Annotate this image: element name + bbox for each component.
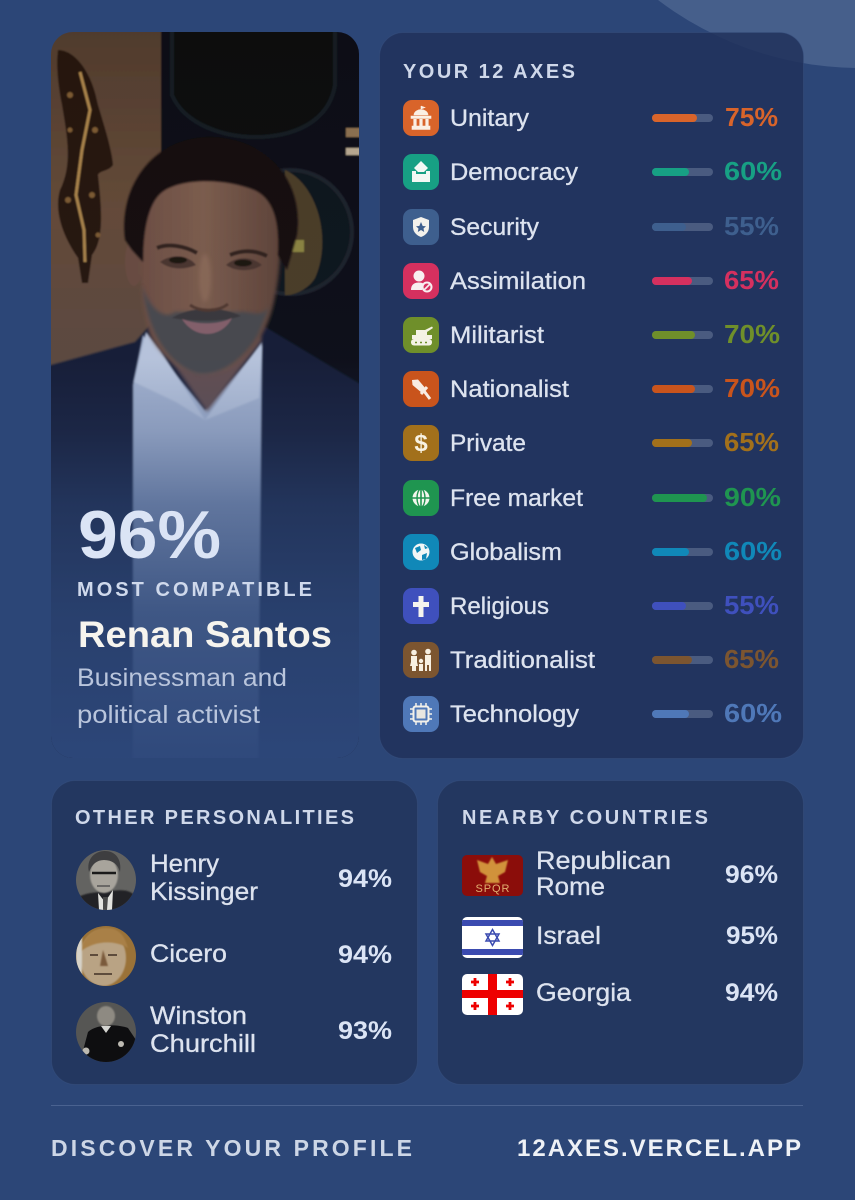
label: Private: [450, 430, 526, 457]
name: Churchill: [150, 1030, 256, 1058]
match description: Businessman and: [77, 664, 287, 692]
bar: [652, 656, 713, 664]
icon: microchip: [403, 696, 439, 732]
flag: Georgia: [462, 974, 523, 1015]
bar: [652, 223, 713, 231]
icon: dollar sign: $: [414, 430, 428, 457]
label: Nationalist: [450, 376, 569, 403]
row: Free market: [403, 480, 781, 516]
match name: Renan Santos: [78, 614, 332, 655]
avatar: Henry Kissinger: [76, 850, 136, 910]
decorative corner circle: [526, 0, 855, 68]
icon: family: [403, 642, 439, 678]
name: Republican: [536, 847, 671, 875]
label: Militarist: [450, 322, 544, 349]
flag: Israel: [462, 917, 523, 958]
heading: OTHER PERSONALITIES: [75, 807, 354, 829]
country: Republican Rome: [462, 850, 778, 896]
value: 90%: [724, 482, 781, 512]
value: 65%: [724, 427, 779, 457]
value: 70%: [724, 373, 780, 403]
panel: other personalities: [52, 780, 418, 1084]
heading: NEARBY COUNTRIES: [462, 807, 708, 829]
value: 75%: [725, 102, 778, 132]
name: [150, 850, 258, 906]
bar: [652, 548, 713, 556]
name: Rome: [536, 873, 605, 901]
row: Democracy: [403, 154, 782, 190]
footer url: 12AXES.VERCEL.APP: [517, 1135, 801, 1162]
country: Israel: [462, 917, 778, 958]
avatar: Winston Churchill: [76, 1002, 136, 1062]
value: 60%: [724, 536, 782, 566]
name: [150, 1002, 256, 1058]
bar: [652, 602, 713, 610]
bar: [652, 494, 713, 502]
score: 94%: [338, 941, 392, 969]
panel: your 12 axes: [380, 32, 804, 758]
person: Henry Kissinger: [76, 850, 392, 910]
score: 96%: [725, 861, 778, 889]
label: Free market: [450, 485, 583, 512]
portrait photo: [40, 20, 370, 770]
row: Globalism: [403, 534, 782, 570]
panel: nearby countries: [438, 780, 804, 1084]
row: Security: [403, 209, 779, 245]
label: Democracy: [450, 159, 578, 186]
row: Traditionalist: [403, 642, 779, 678]
bar: [652, 385, 713, 393]
match percentage: 96%: [78, 497, 221, 573]
label: Globalism: [450, 539, 562, 566]
bar: [652, 168, 713, 176]
value: 65%: [724, 644, 779, 674]
icon: police badge: [403, 209, 439, 245]
row: Unitary: [403, 100, 778, 136]
row: Nationalist: [403, 371, 780, 407]
value: 55%: [724, 590, 779, 620]
avatar: Cicero bust: [76, 926, 136, 986]
score: 94%: [338, 865, 392, 893]
row: Militarist: [403, 317, 780, 353]
score: 93%: [338, 1017, 392, 1045]
bar: [652, 114, 713, 122]
icon: globe grid: [403, 480, 439, 516]
match label: MOST COMPATIBLE: [77, 579, 312, 601]
icon: person with prohibition sign: [403, 263, 439, 299]
icon: tank: [403, 317, 439, 353]
footer call to action: DISCOVER YOUR PROFILE: [51, 1135, 412, 1161]
label: Traditionalist: [450, 647, 595, 674]
name: Cicero: [150, 940, 227, 968]
icon: ballot box: [403, 154, 439, 190]
bar: [652, 439, 713, 447]
label: Assimilation: [450, 268, 586, 295]
icon: cross: [403, 588, 439, 624]
flag: SPQR: SPQR: [476, 883, 510, 895]
label: Security: [450, 214, 539, 241]
label: Religious: [450, 593, 549, 620]
match description: political activist: [77, 701, 260, 729]
label: Unitary: [450, 105, 529, 132]
label: Technology: [450, 701, 579, 728]
icon: capitol building: [403, 100, 439, 136]
name: Kissinger: [150, 878, 258, 906]
value: 55%: [724, 211, 779, 241]
name: [536, 847, 671, 901]
row: Technology: [403, 696, 782, 732]
value: 65%: [724, 265, 779, 295]
icon: earth: [403, 534, 439, 570]
score: 95%: [726, 922, 778, 950]
row: Religious: [403, 588, 779, 624]
row: Assimilation: [403, 263, 779, 299]
value: 70%: [724, 319, 780, 349]
bar: [652, 710, 713, 718]
panel: top match card: [40, 20, 370, 770]
name: Georgia: [536, 979, 631, 1007]
flag: SPQR: [462, 855, 523, 896]
value: 60%: [724, 698, 782, 728]
person: Cicero: [76, 926, 392, 986]
name: Israel: [536, 922, 601, 950]
score: 94%: [725, 979, 778, 1007]
bar: [652, 331, 713, 339]
icon: sword: [403, 371, 439, 407]
person: Winston Churchill: [76, 1002, 392, 1062]
match description: [77, 664, 287, 729]
name: Winston: [150, 1002, 247, 1030]
country: Georgia: [462, 974, 778, 1015]
name: Henry: [150, 850, 220, 878]
value: 60%: [724, 156, 782, 186]
icon: dollar sign: [403, 425, 439, 461]
row: Private: [403, 425, 779, 461]
heading: YOUR 12 AXES: [403, 61, 575, 83]
bar: [652, 277, 713, 285]
